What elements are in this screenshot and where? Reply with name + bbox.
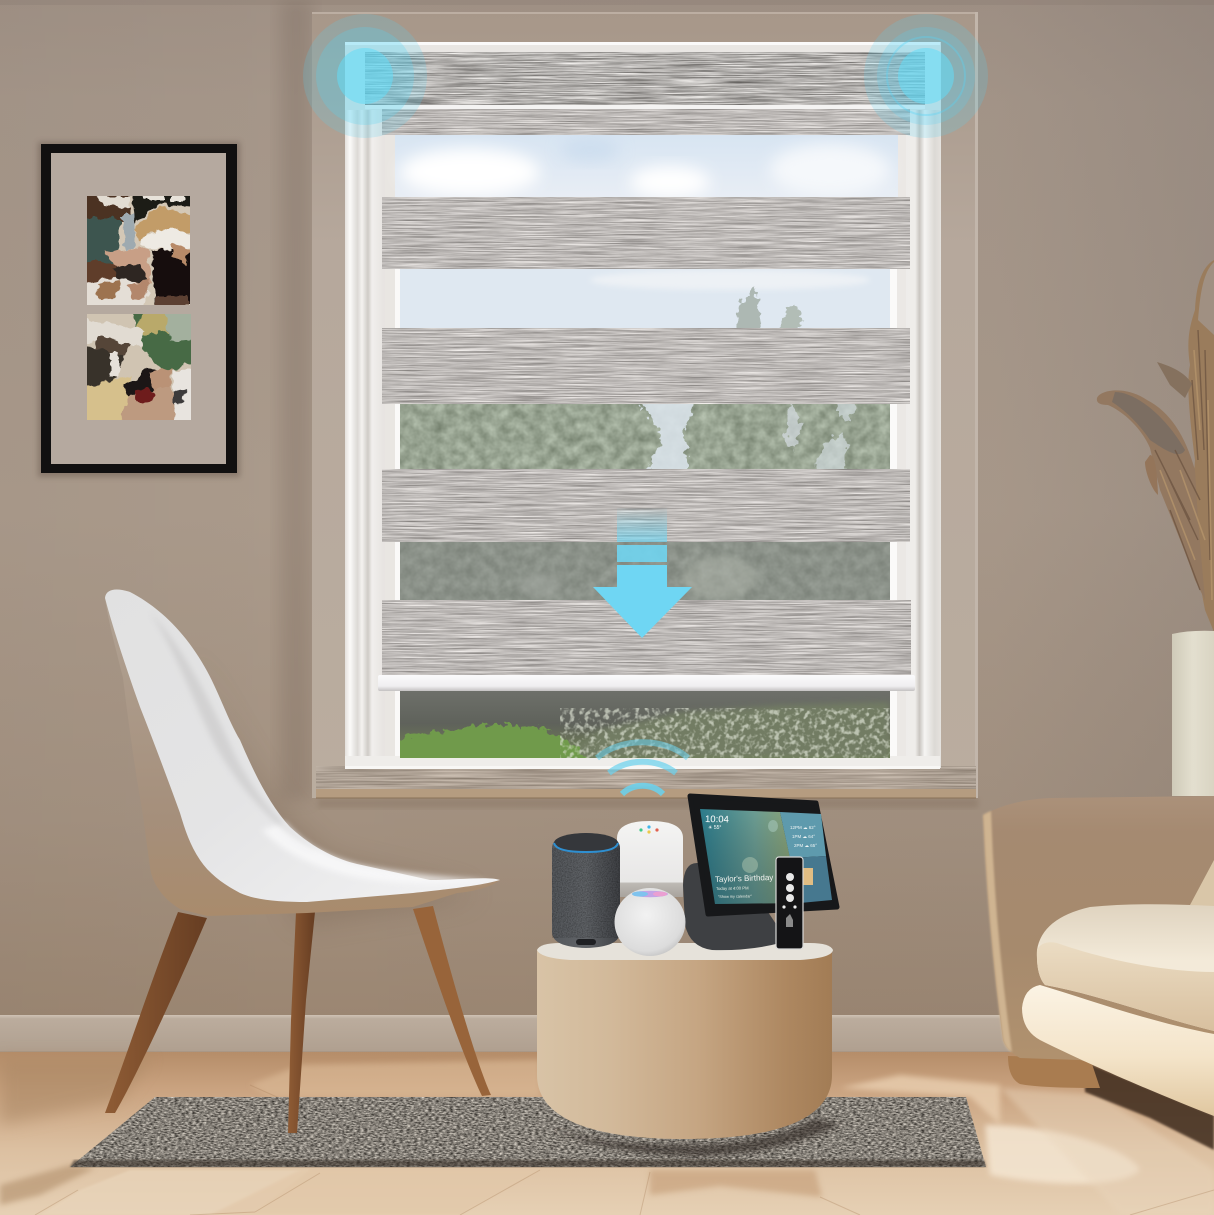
sky [395,130,898,200]
screen forecast 2: 1PM ☁ 64° [792,834,815,839]
baseboard [0,1015,1214,1053]
device: Echo smart speaker [552,833,620,948]
sheer band 3 [400,404,890,469]
wood floor [0,1052,1214,1215]
headrail [365,52,925,105]
screen [700,809,800,904]
ottoman side table [537,943,833,1139]
collage picture bottom [87,314,191,420]
framed wall art [38,142,240,477]
bottom rail [378,675,915,691]
shell back [105,590,500,916]
slat 3 [382,469,910,542]
seat highlight [262,822,490,883]
collage picture top [87,196,190,305]
sofa foot [1008,1056,1100,1088]
rug [70,1097,986,1167]
garden [400,691,890,758]
slat 2 [382,328,910,404]
device: Echo Show [683,796,837,950]
right motor signal rings [864,14,988,138]
pillow [1190,860,1214,908]
view through window [395,130,898,765]
floor planks and light patches [0,1058,1214,1215]
woven sill [316,766,976,791]
device: Google Home [617,821,683,897]
smart devices group [552,796,837,956]
slat 1 [382,197,910,269]
slat 4 [382,600,911,676]
shell ridge shade [150,612,320,852]
icon: wireless signal arcs [597,742,688,794]
pampas grass [1097,260,1214,632]
sofa shadow on floor [1085,1062,1214,1150]
screen subtitle: Today at 4:00 PM [716,885,749,891]
screen time: 10:04 [705,814,729,825]
base [683,863,780,950]
upper cushion [1037,904,1214,1031]
screen title: Taylor's Birthday [715,873,773,884]
screen forecast 3: 2PM ☁ 65° [794,843,817,848]
top slat [382,109,910,135]
left motor signal rings [303,14,427,138]
sheer band 4 [400,541,890,602]
sheer band 2 [400,268,890,332]
plant [1097,260,1214,796]
screen forecast: 12PM ☁ 62° [790,825,816,830]
window frame [345,42,941,769]
device: remote control [776,857,803,949]
chair [105,590,500,1133]
icon: down arrow [593,508,692,638]
sofa [983,796,1214,1150]
window casing and sill [312,12,978,799]
sofa arm and back [983,796,1214,1100]
lower cushion [1022,985,1214,1116]
zebra blind [345,42,940,691]
legs [105,912,207,1113]
screen prompt: "Show my calendar" [718,894,753,899]
shell seat [105,590,500,902]
bezel [690,796,837,914]
vase [1172,631,1214,796]
device: HomePod mini [614,888,686,956]
screen weather: ☀ 55° [708,825,721,831]
